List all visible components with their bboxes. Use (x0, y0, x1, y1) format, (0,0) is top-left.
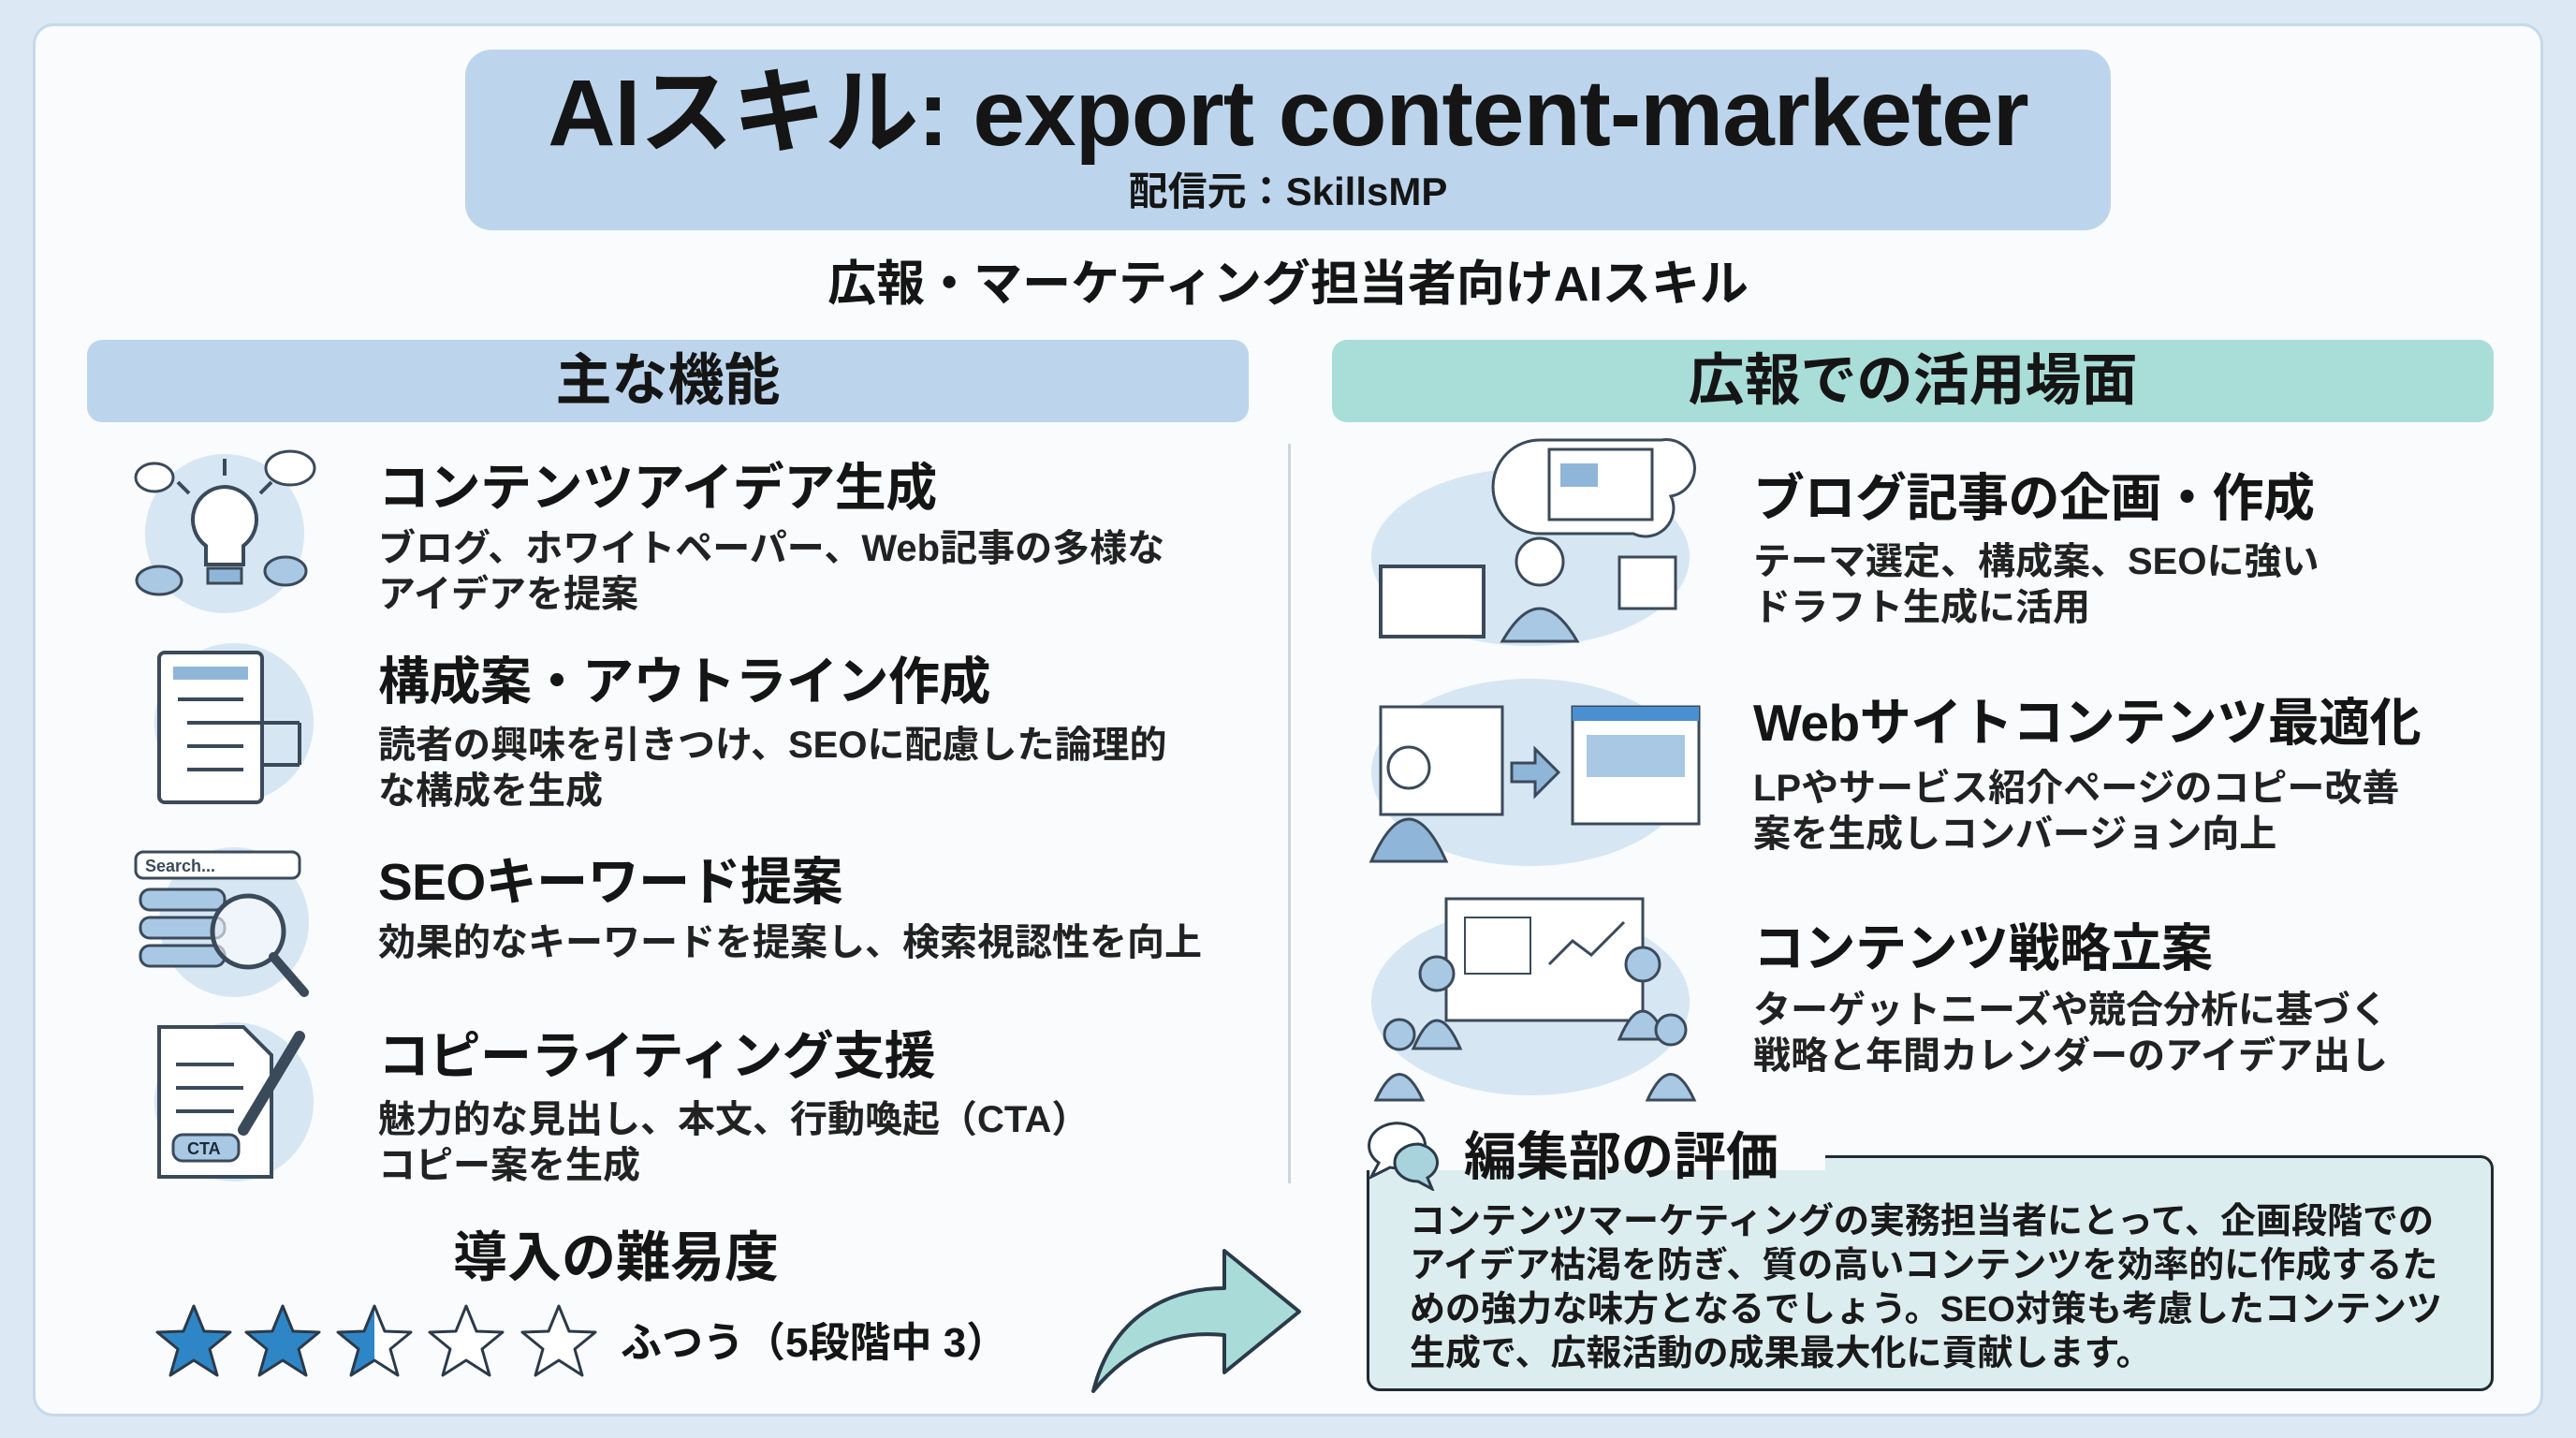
heading: コンテンツ戦略立案 (1753, 919, 2213, 977)
illustration: team strategy meeting (1371, 897, 1696, 1101)
icon: outline document (154, 643, 314, 804)
source: 配信元：SkillsMP (1129, 169, 1447, 213)
description: テーマ選定、構成案、SEOに強い (1753, 541, 2319, 582)
heading: コンテンツアイデア生成 (378, 459, 937, 517)
heading: SEOキーワード提案 (378, 853, 842, 911)
description (378, 528, 1164, 615)
review section (1367, 1122, 2494, 1391)
feature 2 (154, 643, 1166, 812)
right header (1332, 340, 2494, 422)
description: ターゲットニーズや競合分析に基づく (1753, 990, 2388, 1031)
left header (87, 340, 1249, 422)
illustration: woman at computer (1371, 438, 1696, 646)
review text (1410, 1202, 2442, 1373)
description (1753, 990, 2388, 1077)
description: 案を生成しコンバージョン向上 (1753, 814, 2276, 855)
review heading: 編集部の評価 (1464, 1127, 1778, 1186)
icon: speech bubbles (1368, 1122, 1440, 1191)
rating stars (155, 1305, 1007, 1377)
divider (1288, 444, 1291, 1183)
heading: Webサイトコンテンツ最適化 (1753, 694, 2421, 752)
left header: 主な機能 (556, 349, 781, 412)
icon: document with pen (154, 1022, 314, 1181)
use case 1 (1371, 438, 2319, 646)
icon: lightbulb ideas (135, 449, 316, 613)
description: ブログ、ホワイトペーパー、Web記事の多様な (378, 528, 1164, 569)
feature 3 (135, 847, 1202, 997)
description: 効果的なキーワードを提案し、検索視認性を向上 (378, 922, 1202, 963)
feature 1 (135, 449, 1164, 615)
feature 4 (154, 1022, 1089, 1186)
description: な構成を生成 (378, 770, 603, 812)
title box (465, 50, 2111, 230)
description: アイデアを提案 (378, 574, 638, 615)
use case 3 (1371, 897, 2388, 1101)
arrow (1091, 1249, 1301, 1393)
description: ドラフト生成に活用 (1753, 587, 2090, 628)
heading: コピーライティング支援 (378, 1027, 935, 1085)
icon: document with pen: CTA (187, 1139, 221, 1158)
review text: コンテンツマーケティングの実務担当者にとって、企画段階での (1410, 1202, 2434, 1241)
mask for heading gap (1357, 1142, 1825, 1170)
description (1753, 768, 2399, 855)
description: LPやサービス紹介ページのコピー改善 (1753, 768, 2399, 809)
review box (1367, 1155, 2494, 1391)
title: AIスキル: export content-marketer (548, 61, 2028, 166)
description: 戦略と年間カレンダーのアイデア出し (1753, 1035, 2388, 1077)
icon: search keywords (135, 847, 309, 997)
difficulty heading: 導入の難易度 (453, 1227, 779, 1288)
review text: めの強力な味方となるでしょう。SEO対策も考慮したコンテンツ (1410, 1290, 2442, 1329)
description: 魅力的な見出し、本文、行動喚起（CTA） (378, 1099, 1089, 1140)
heading: ブログ記事の企画・作成 (1753, 469, 2315, 527)
heading: 構成案・アウトライン作成 (378, 653, 990, 711)
review text: 生成で、広報活動の成果最大化に貢献します。 (1410, 1334, 2152, 1373)
description (1753, 541, 2319, 628)
icon: search keywords: Search... (145, 857, 215, 875)
right header: 広報での活用場面 (1689, 349, 2138, 412)
description (378, 725, 1166, 812)
description: コピー案を生成 (378, 1145, 640, 1186)
review text: アイデア枯渇を防ぎ、質の高いコンテンツを効率的に作成するた (1410, 1246, 2437, 1285)
tagline: 広報・マーケティング担当者向けAIスキル (827, 257, 1749, 312)
description (378, 1099, 1089, 1186)
illustration: website optimization (1368, 679, 1700, 866)
rating label: ふつう（5段階中 3） (621, 1320, 1007, 1366)
use case 2 (1368, 679, 2421, 866)
description: 読者の興味を引きつけ、SEOに配慮した論理的 (378, 725, 1166, 766)
